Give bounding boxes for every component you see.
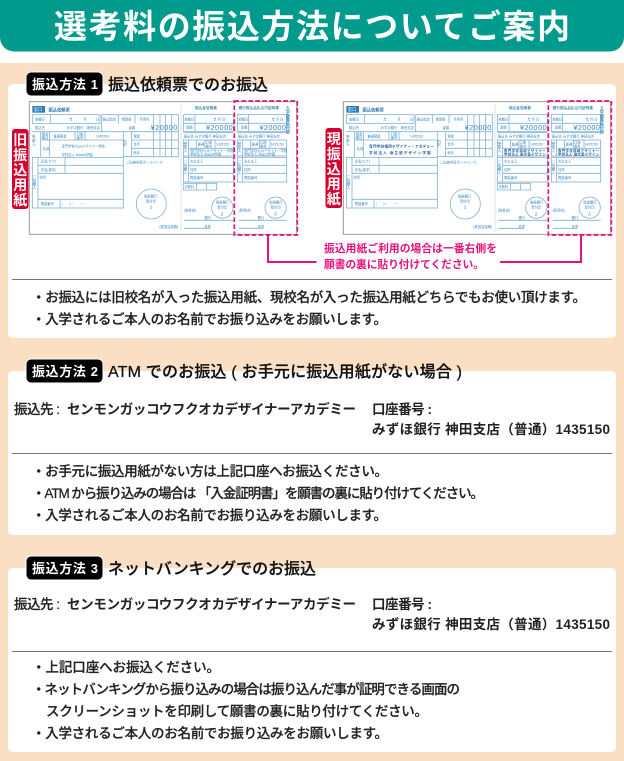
form: current payment slip: 学校法人 麻生塾デザイン: [504, 152, 546, 157]
form: old payment slip: 金額: [128, 125, 136, 130]
form: old payment slip: 氏名(漢字): [41, 167, 56, 172]
form: current payment slip: 月: [397, 117, 401, 121]
form: current payment slip: 内訳: [436, 139, 441, 147]
form: old payment slip: 受付印: [271, 204, 281, 209]
form: old payment slip: 1435150: [216, 143, 229, 147]
callout: attach rightmost stub: [324, 241, 497, 271]
form: current payment slip: おなまえ: [558, 159, 572, 164]
form: current payment slip: ご依頼人: [497, 159, 502, 175]
notes: method 3: [32, 660, 460, 741]
form: current payment slip: 1435150: [530, 143, 543, 147]
form: old payment slip: 専門学校九州デザイナー学院: [244, 148, 288, 153]
form: old payment slip: 普通: [252, 142, 259, 147]
form: old payment slip: 普通預金: [53, 133, 67, 138]
form: old payment slip: ( )ー ー: [62, 202, 84, 206]
form: current payment slip: 銀行: [572, 215, 579, 220]
form: old payment slip: ご依頼人: [32, 174, 37, 190]
form: old payment slip: 取扱銀行: [216, 200, 230, 205]
form: old payment slip: 支店: [258, 223, 265, 228]
badge: method 2: [26, 359, 103, 383]
form: current payment slip: 電話番号: [558, 175, 572, 180]
form: current payment slip: 名前: [357, 146, 364, 151]
form: old payment slip: 銀行: [204, 215, 212, 220]
notes: method 3: ・入学されるご本人のお名前でお振り込みをお願いします。: [32, 725, 388, 741]
form: old payment slip: 他手: [133, 150, 141, 155]
form: current payment slip: 手数料: [498, 184, 509, 189]
form: current payment slip: ご依頼人: [346, 174, 351, 190]
notes: method 2: ・お手元に振込用紙がない方は上記口座へお振込ください。: [32, 463, 388, 479]
form: current payment slip: 2: [535, 211, 538, 217]
form: old payment slip: ご依頼人: [183, 159, 188, 175]
form: current payment slip: 金額: [555, 125, 562, 130]
form: old payment slip: 口座: [206, 141, 213, 145]
form: current payment slip: 支店: [572, 223, 579, 228]
form: old payment slip: 取扱銀行: [269, 200, 283, 205]
badge: method 1: 振込方法 1: [32, 77, 98, 92]
badge: method 1: [26, 72, 103, 96]
form: old payment slip: 手書何: [139, 116, 150, 121]
form: old payment slip: 支店: [204, 223, 212, 228]
form: old payment slip: 入学願書貼付用: [286, 106, 291, 134]
form: current payment slip: 窓口: [348, 106, 356, 112]
tag: old form: 用: [13, 177, 27, 193]
form: old payment slip: 振込金受取書: [195, 105, 217, 110]
form: current payment slip: 手書何: [453, 116, 464, 121]
form: current payment slip: ¥20000: [520, 123, 547, 132]
form: current payment slip: 学校法人 麻生塾デザイン学園: [369, 150, 431, 155]
tag: old form: 込: [13, 162, 27, 178]
form: old payment slip: 受取人: [237, 141, 242, 153]
form: current payment slip: 預金: [356, 131, 363, 136]
form: old payment slip: 銀行: [258, 215, 265, 220]
form: current payment slip: 口座: [391, 132, 398, 136]
account details: method 3: [14, 596, 610, 632]
form: current payment slip: 受取人: [345, 134, 350, 147]
form: old payment slip: 電話番号: [244, 175, 258, 180]
form: current payment slip: (取扱店): [498, 208, 510, 213]
form: current payment slip: 他手: [447, 150, 455, 155]
form: current payment slip: 電信扱: [436, 116, 446, 121]
form: old payment slip: 2: [221, 211, 224, 217]
panel: method 2: [8, 359, 616, 535]
form: old payment slip: 口座: [260, 141, 267, 145]
form: current payment slip: 1: [464, 205, 467, 211]
form: old payment slip: 専門学校九州デザイナー学院: [62, 144, 106, 149]
form: old payment slip: 内訳: [122, 139, 127, 147]
form: current payment slip: 金額: [442, 125, 450, 130]
form: current payment slip: 普通預金: [367, 133, 381, 138]
form: current payment slip: 住所: [558, 167, 565, 172]
form: old payment slip: 番号: [206, 143, 213, 148]
form: current payment slip: 番号: [520, 143, 527, 148]
notes: method 1: [32, 289, 586, 327]
form: current payment slip: 金額: [500, 125, 507, 130]
tag: new form: 込: [327, 161, 341, 177]
form: old payment slip: 振込先 みずほ銀行 神田支店: [238, 133, 280, 138]
form: old payment slip: 振込依頼票: [48, 106, 71, 113]
title banner: 選考料の振込方法についてご案内: [54, 8, 570, 45]
form: current payment slip: 振込金受取書: [509, 105, 531, 110]
form: current payment slip: 取扱銀行: [458, 194, 472, 199]
notes: method 3: ・上記口座へお振込ください。: [32, 660, 220, 675]
form: old payment slip: 電信扱: [122, 116, 132, 121]
notes: method 1: ・お振込には旧校名が入った振込用紙、現校名が入った振込用紙どちらでもお使い頂けます。: [32, 289, 586, 305]
badge: method 2: 振込方法 2: [32, 364, 98, 379]
form: current payment slip: 現金: [447, 133, 455, 138]
form: current payment slip: ¥20000: [465, 123, 491, 132]
form: old payment slip: 住所: [190, 167, 197, 172]
form: current payment slip: 受取人: [497, 141, 502, 153]
form: old payment slip: (発送店保管): [159, 224, 178, 229]
form: old payment slip: 口座: [77, 132, 84, 136]
form: old payment slip: 日: [96, 117, 99, 121]
form: current payment slip: 普通: [512, 142, 519, 147]
tag: old form: [12, 129, 28, 209]
heading: method 1: 振込依頼票でのお振込: [108, 76, 268, 94]
arrow: connector to rightmost stub: [268, 235, 581, 262]
form: old payment slip: 依頼日: [35, 116, 45, 121]
form: old payment slip: 依頼日: [238, 116, 248, 121]
form: current payment slip: 専門学校福岡デザイナー: [558, 148, 600, 153]
form: old payment slip: 学校法人 Adachi学園: [62, 152, 93, 157]
form: old payment slip: 氏名(カナ): [41, 159, 56, 164]
title banner: [0, 0, 624, 52]
form: old payment slip: 金額: [241, 125, 248, 130]
form: current payment slip: 3: [588, 211, 591, 217]
form: current payment slip: 学校法人 麻生塾デザイン: [558, 152, 600, 157]
form: current payment slip: [343, 101, 611, 235]
tag: old form: 紙: [13, 192, 27, 208]
form: old payment slip: ¥20000: [151, 123, 177, 132]
form: old payment slip: 取扱銀行: [144, 194, 158, 199]
form: old payment slip: [29, 101, 297, 235]
tag: old form: 旧: [13, 132, 27, 148]
notes: method 2: [32, 463, 484, 523]
form: old payment slip: 依頼日: [184, 116, 194, 121]
form: current payment slip: 依頼日: [552, 116, 562, 121]
account details: method 3: センモンガッコウフクオカデザイナーアカデミー: [67, 596, 356, 612]
form: old payment slip: ¥20000: [259, 123, 286, 132]
form: old payment slip: 学校法人 Adachi学園: [190, 152, 222, 157]
form: current payment slip: 口座: [574, 141, 581, 145]
account details: method 2: 振込先 :: [14, 402, 60, 417]
form: old payment slip: 普通: [198, 142, 205, 147]
form: current payment slip: 依頼日: [498, 116, 508, 121]
form: old payment slip: 振込先: [35, 125, 46, 130]
form: old payment slip: 名前: [43, 146, 50, 151]
form: current payment slip: 口座: [520, 141, 527, 145]
form: old payment slip: 住所: [244, 167, 251, 172]
form: current payment slip: 氏名(漢字): [355, 167, 370, 172]
form: current payment slip: 住所: [504, 167, 511, 172]
form: current payment slip: 1435150: [585, 143, 598, 147]
form: current payment slip: 年 月 日: [586, 116, 598, 121]
form: old payment slip: 年: [69, 116, 73, 121]
form: old payment slip: おなまえ: [190, 159, 204, 164]
form: old payment slip: (和用店): [239, 208, 251, 213]
form: old payment slip: 受付印: [217, 204, 228, 209]
form: old payment slip: 電話番号: [41, 201, 55, 206]
tag: new form: 振: [327, 146, 341, 162]
form: old payment slip: 1435150: [96, 134, 109, 138]
tag: new form: 紙: [327, 191, 341, 207]
form: old payment slip: 振込先 みずほ銀行 神田支店: [184, 133, 226, 138]
form: current payment slip: 取扱銀行: [583, 200, 597, 205]
form: old payment slip: 学校法人 Adachi学園: [244, 152, 276, 157]
notes: method 2: ・入学されるご本人のお名前でお振り込みをお願いします。: [32, 507, 387, 523]
form: old payment slip: 電話番号: [190, 175, 204, 180]
form: old payment slip: 手数料: [184, 184, 195, 189]
form: current payment slip: 電話番号: [355, 201, 369, 206]
callout: attach rightmost stub: 願書の裏に貼り付けてください。: [324, 257, 484, 271]
form: old payment slip: 受取人: [183, 141, 188, 153]
form: current payment slip: 振込先: [349, 125, 360, 130]
form: old payment slip: 住所: [39, 175, 47, 180]
account details: method 2: [14, 401, 610, 437]
form: current payment slip: 振込指定: [417, 116, 431, 121]
form: current payment slip: 普通: [566, 142, 573, 147]
form: current payment slip: 受付印: [531, 204, 542, 209]
tag: new form: [326, 128, 342, 208]
form: old payment slip: 種目: [42, 135, 48, 140]
form: current payment slip: 専門学校福岡デザイナー・アカデミー: [369, 143, 434, 148]
form: old payment slip: 1435150: [271, 143, 284, 147]
form: current payment slip: 受取人: [551, 141, 556, 153]
form: old payment slip: 番号: [77, 135, 84, 140]
badge: method 3: 振込方法 3: [32, 561, 98, 576]
form: current payment slip: 専門学校福岡デザイナー: [504, 148, 546, 153]
notes: method 1: ・入学されるご本人のお名前でお振り込みをお願いします。: [32, 311, 387, 327]
form: old payment slip: 1: [150, 205, 153, 211]
form: old payment slip: 合手: [133, 142, 141, 147]
panel: method 3: [8, 556, 616, 752]
account details: method 3: 口座番号 :: [372, 597, 432, 612]
form: current payment slip: ( )ー ー: [376, 202, 398, 206]
form: current payment slip: (発送店保管): [473, 224, 492, 229]
form: current payment slip: 取扱銀行: [530, 200, 544, 205]
panel: method 1: [8, 72, 616, 338]
tag: new form: 用: [327, 176, 341, 192]
account details: method 2: センモンガッコウフクオカデザイナーアカデミー: [67, 401, 356, 417]
form: old payment slip: ご依頼人: [237, 159, 242, 175]
form: current payment slip: 1435150: [410, 134, 423, 138]
form: current payment slip: 番号: [391, 135, 398, 140]
account details: method 3: みずほ銀行 神田支店（普通）1435150: [372, 616, 610, 632]
form: current payment slip: 電話番号: [504, 175, 518, 180]
callout: attach rightmost stub: 振込用紙ご利用の場合は一番右側を: [324, 241, 497, 255]
form: old payment slip: 振込指定: [103, 116, 117, 121]
form: current payment slip: 振込先 みずほ銀行 神田支店: [552, 133, 594, 138]
form: current payment slip: ご依頼人: [551, 159, 556, 175]
form: current payment slip: 日: [410, 117, 413, 121]
form: old payment slip: 金額: [186, 125, 193, 130]
form: current payment slip: 住所: [353, 175, 361, 180]
form: current payment slip: ¥20000: [573, 123, 600, 132]
form: old payment slip: 年 月 日: [213, 116, 225, 121]
tag: new form: 現: [327, 131, 341, 147]
form: old payment slip: みずほ銀行 神田支店: [67, 125, 101, 130]
badge: method 3: [26, 556, 103, 580]
account details: method 3: 振込先 :: [14, 597, 60, 612]
form: current payment slip: みずほ銀行 神田支店: [381, 125, 415, 130]
form: current payment slip: 年 月 日: [527, 116, 539, 121]
form: old payment slip: 窓口: [34, 106, 42, 112]
form: current payment slip: 受付印: [585, 204, 595, 209]
form: old payment slip: 銀行振込品払込付証明書: [239, 105, 279, 110]
form: current payment slip: 振込依頼票: [362, 106, 385, 113]
form: current payment slip: 支店: [518, 223, 526, 228]
form: old payment slip: 受付印: [146, 198, 157, 203]
form: old payment slip: 番号: [260, 143, 267, 148]
notes: method 3: スクリーンショットを印刷して願書の裏に貼り付けてください。: [46, 703, 428, 719]
tag: old form: 振: [13, 147, 27, 163]
form: current payment slip: (和用店): [553, 208, 565, 213]
form: current payment slip: 入学願書貼付用: [600, 106, 605, 134]
form: current payment slip: おなまえ: [504, 159, 518, 164]
form: old payment slip: 現金: [133, 133, 141, 138]
form: old payment slip: おなまえ: [244, 159, 258, 164]
form: current payment slip: 銀行振込品払込付証明書: [553, 105, 593, 110]
form: old payment slip: 3: [274, 211, 277, 217]
notes: method 2: ・ATM から振り込みの場合は 「入金証明書」を願書の裏に貼り付けてください。: [32, 485, 484, 501]
form: current payment slip: 種目: [356, 135, 362, 140]
form: current payment slip: 年: [383, 116, 387, 121]
form: old payment slip: 受取人: [31, 134, 36, 147]
account details: method 2: 口座番号 :: [372, 402, 432, 417]
form: old payment slip: ¥20000: [206, 123, 233, 132]
form: current payment slip: 受付印: [460, 198, 471, 203]
form: old payment slip: 専門学校九州デザイナー学院: [190, 148, 234, 153]
heading: method 2: ATM でのお振込 ( お手元に振込用紙がない場合 ): [108, 362, 462, 381]
form: old payment slip: 月: [83, 117, 87, 121]
form: old payment slip: 預金: [42, 131, 49, 136]
form: old payment slip: (取扱店): [184, 208, 196, 213]
form: current payment slip: 依頼日: [349, 116, 359, 121]
form: current payment slip: 銀行: [518, 215, 526, 220]
account details: method 2: みずほ銀行 神田支店（普通）1435150: [372, 421, 610, 437]
form: current payment slip: 番号: [574, 143, 581, 148]
form: current payment slip: 合手: [447, 142, 455, 147]
form: current payment slip: ご出納内容ボールペンで: [440, 159, 477, 164]
form: current payment slip: 振込先 みずほ銀行 神田支店: [498, 133, 540, 138]
notes: method 3: ・ネットバンキングから振り込みの場合は振り込んだ事が証明できる画面の: [32, 681, 460, 697]
form: old payment slip: 年 月 日: [272, 116, 284, 121]
form: current payment slip: 氏名(カナ): [355, 159, 370, 164]
heading: method 3: ネットバンキングでのお振込: [108, 560, 316, 578]
form: old payment slip: ご出納内容ボールペンで: [126, 159, 163, 164]
